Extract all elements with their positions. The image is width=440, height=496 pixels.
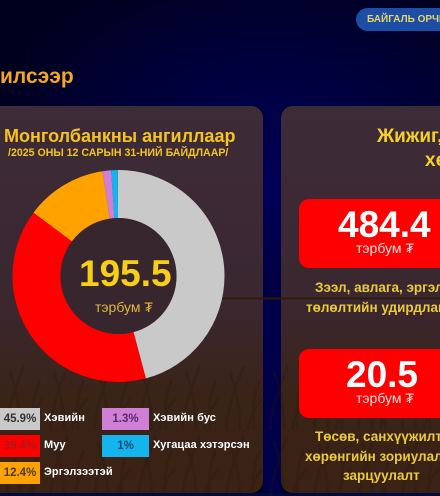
legend item: bad bbox=[0, 435, 40, 457]
section heading: илсээр bbox=[0, 65, 74, 88]
panel subheading: /2025 ОНЫ 12 САРЫН 31-НИЙ БАЙДЛААР/ bbox=[8, 147, 228, 159]
pill badge bbox=[356, 8, 440, 31]
legend item: abnormal: 1.3% bbox=[112, 413, 139, 425]
legend bbox=[0, 408, 250, 484]
stat description 2: зарцуулалт bbox=[343, 468, 420, 483]
donut chart bbox=[12, 170, 224, 382]
panel heading: Монголбанкны ангиллаар bbox=[4, 126, 235, 146]
legend item: overdue bbox=[102, 435, 149, 457]
stat card: 20.5: тэрбум ₮ bbox=[356, 390, 414, 406]
legend: Хугацаа хэтэрсэн bbox=[153, 439, 250, 451]
legend: Муу bbox=[44, 439, 66, 451]
stat card: 484.4 bbox=[299, 199, 440, 268]
donut unit: тэрбум ₮ bbox=[95, 299, 153, 315]
right panel heading bbox=[377, 126, 440, 170]
legend: Хэвийн bbox=[44, 412, 85, 424]
legend item: doubtful: 12.4% bbox=[4, 467, 36, 479]
stat card: 20.5: 20.5 bbox=[346, 354, 418, 395]
legend item: normal bbox=[0, 408, 40, 430]
donut total value: 195.5 bbox=[79, 253, 172, 294]
stat card: 484.4: 484.4 bbox=[338, 204, 431, 245]
legend: Эргэлзээтэй bbox=[44, 466, 113, 478]
panel: small and medium bbox=[281, 106, 440, 493]
legend item: normal: 45.9% bbox=[4, 413, 36, 425]
legend item: bad: 39.4% bbox=[4, 440, 36, 452]
panel: Mongolbank classification bbox=[0, 106, 263, 493]
legend item: overdue: 1% bbox=[117, 440, 134, 452]
legend item: abnormal bbox=[102, 408, 149, 430]
stat card: 20.5 bbox=[299, 349, 440, 418]
stat card: 484.4: тэрбум ₮ bbox=[356, 240, 414, 256]
stat description 1 bbox=[306, 280, 440, 315]
stat description 2: Төсөв, санхүүжилт bbox=[315, 429, 440, 444]
legend: Хэвийн бус bbox=[153, 412, 216, 424]
stat description 2 bbox=[305, 429, 440, 483]
legend item: doubtful bbox=[0, 462, 40, 484]
